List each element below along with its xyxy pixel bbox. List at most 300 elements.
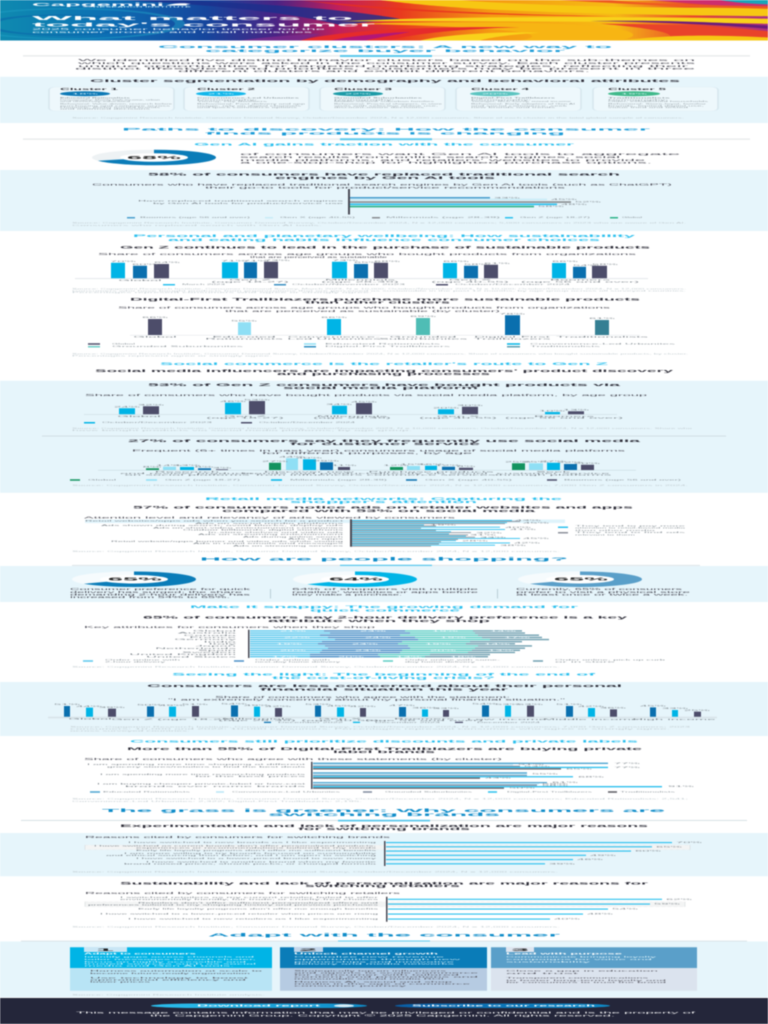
legend: Order online with same- <box>405 659 500 661</box>
legend <box>163 284 570 286</box>
bar chart: financial concern: 54% <box>221 703 247 705</box>
column 3: lead with purpose <box>491 947 697 991</box>
subtitle: consumer product and retail industries <box>32 31 312 34</box>
bar chart: social media usage: 11% <box>331 465 357 466</box>
legend: October/December 2024 <box>455 284 570 286</box>
column 2: unlock channel growth: Harness AI, social and shop <box>294 981 452 983</box>
bar chart: financial concern: Middle income <box>543 718 639 720</box>
heading: switching brands: for switching brands <box>298 827 470 831</box>
bar chart: brand switching reasons: experiences or recommendations tailored to my needs <box>136 847 376 849</box>
stat: 65% grocery delivery <box>70 573 250 599</box>
bar chart: social purchases: Global <box>117 415 161 418</box>
legend: Convenience-Led Urbanites <box>530 343 675 345</box>
legend: Millennials (age 28-39) <box>290 479 387 481</box>
panel heading: 58% of consumers have replaced traditional search <box>148 173 620 176</box>
panel heading: engines by Gen AI tools <box>275 176 495 180</box>
bar chart: financial concern: 50% <box>137 704 163 706</box>
bar chart: sustainability by age: 66% <box>443 261 469 262</box>
title: today's consumer <box>32 21 375 28</box>
bar chart: social purchases: Millennials <box>317 415 387 417</box>
bar chart: social purchases: (age 18-27) <box>206 417 284 419</box>
bar chart: sustainability by cluster: 61% <box>589 318 615 319</box>
heading: ads: compared with 53% on social media <box>222 509 536 513</box>
bar chart: private label agreement: grocery stores/retailers to find the best deals <box>107 766 305 768</box>
card: cluster 4: Digital-First Trailblazers <box>471 97 555 99</box>
heading: private labels <box>127 747 642 754</box>
source note <box>72 353 688 357</box>
stacked bar chart: delivery attributes: 19% <box>432 630 458 632</box>
bar chart: retailer switching reasons: preferences tailored to my shopping history and previous purchases <box>88 904 378 906</box>
bar chart: financial concern: 51% <box>182 704 208 705</box>
column 2: unlock channel growth: and agents to scale commerce <box>294 972 478 974</box>
bar chart: financial concern: Global <box>68 718 112 720</box>
bar chart: financial concern: Low income <box>467 718 547 720</box>
bar chart: sustainability by age: 61% <box>484 262 510 264</box>
card: cluster 3: Middle-income suburban families <box>334 100 434 102</box>
title <box>32 15 375 28</box>
legend: Grounded Suburbanites <box>385 791 472 793</box>
legend: March 2023 <box>182 284 225 286</box>
bar chart: brand switching reasons: and ethical sourcing than before, and I am open to switching <box>106 854 376 856</box>
stacked bar chart: delivery attributes: Global <box>193 630 236 632</box>
card: cluster 3: discount-aware decisions <box>334 106 424 108</box>
bar chart: social media usage: 8% <box>195 466 213 468</box>
legend: Boomers (age 56 and over) <box>564 479 681 481</box>
gen AI description: media platforms, and retailers' websites to provide <box>240 158 645 162</box>
column 1: adapt to consumers: operational efficiency and <box>90 979 246 981</box>
bar chart: private label agreement: 51% <box>518 764 544 765</box>
bar chart: financial concern: 51% <box>556 704 582 705</box>
bar chart: private label agreement: 55% <box>532 773 558 775</box>
bar chart: financial concern: Gen X <box>319 718 361 720</box>
bar chart: social purchases: 46% <box>220 401 246 402</box>
legend <box>90 791 675 793</box>
section heading: quick commerce <box>190 605 579 612</box>
legend: relevant to them <box>575 534 635 536</box>
logo: RESEARCH INSTITUTE <box>93 6 191 8</box>
stacked bar chart: delivery attributes: 13% <box>396 656 422 658</box>
bar chart: retailer switching reasons: 59% <box>654 903 680 905</box>
bar chart: private label agreement: brands over name brands <box>125 785 305 787</box>
gen AI description <box>240 152 680 164</box>
bar chart: sustainability by age: Gen X <box>449 279 491 281</box>
bar chart: social purchases: 53% <box>244 399 270 401</box>
legend: October/December 2023 <box>102 422 212 424</box>
column 3: lead with purpose: sustainability <box>506 961 591 963</box>
bar chart: social media usage: 20% <box>574 462 600 464</box>
column 2: unlock channel growth: for consumer with tailored <box>294 974 459 976</box>
source note <box>72 428 692 431</box>
bar chart: private label agreement: I am spending more time researching products <box>100 773 305 776</box>
bar chart: ads attention: 41% <box>510 529 536 530</box>
source note: Source: Capgemini Research Institute analysis. <box>72 994 265 996</box>
column 2: unlock channel growth: measurable social media ROI <box>294 978 444 980</box>
legend <box>70 479 681 481</box>
source note: Consumers who replaced search with Gen AI tools. <box>72 225 322 226</box>
bar chart: sustainability by cluster: 66% <box>321 317 347 318</box>
bar chart: social media usage: 25% <box>505 461 531 463</box>
stacked bar chart: delivery attributes: 14% <box>484 643 510 645</box>
column 3: lead with purpose: to foster long-term loyalty and <box>506 979 666 981</box>
bar chart: ads attention: Ads on streaming entertainment <box>198 533 343 536</box>
section heading: grass is greener: The grass is greener: Why consumers are <box>102 808 665 813</box>
bar chart: social media usage: Purchase products <box>369 471 493 473</box>
bar chart: financial concern: 45% <box>327 705 353 707</box>
stat: 65% in-store <box>516 573 690 596</box>
card: cluster 2 <box>184 87 309 111</box>
source note: have bought products via social media platforms, by age group. <box>72 430 412 431</box>
panel heading: social media platform <box>283 386 478 390</box>
bar chart: sustainability by age: 71% <box>243 260 269 262</box>
chart subtitle <box>132 449 625 455</box>
column 2: unlock channel growth: Capitalize new revenue <box>294 956 444 958</box>
bar chart: social media usage: Research <box>155 471 219 473</box>
bar chart: social purchases: Boomers <box>534 415 594 417</box>
bar chart: financial concern: 44% <box>76 705 102 707</box>
bar chart: financial concern: 51% <box>54 704 80 705</box>
legend: Convenience-Led Urbanites <box>232 791 340 793</box>
chart title: Share of consumers who agree with these statements (by cluster) <box>84 758 502 760</box>
bar chart: financial concern: 36% <box>412 707 438 709</box>
bar chart: social media usage: 25% <box>523 461 549 463</box>
heading: customer service <box>128 439 641 446</box>
panel: cluster segmentation <box>0 77 768 123</box>
chart subtitle: their go-to tools for product/service recommendations <box>205 186 565 189</box>
card: cluster 1 <box>49 87 174 111</box>
bar chart: sustainability by age: Global <box>118 279 162 281</box>
bar chart: sustainability by cluster: 78% <box>499 313 525 315</box>
donut: 68%: 68% <box>127 155 181 160</box>
bar chart: financial concern: 36% <box>600 707 626 709</box>
bar chart: replaced search <box>138 189 601 214</box>
source note: Percentages represent agree or strongly agree. <box>72 355 272 357</box>
bar chart: financial concern: 33% <box>662 708 688 709</box>
bar chart: private label agreement: 50% <box>509 787 535 789</box>
section heading: paths to discovery <box>23 127 750 140</box>
section heading: grass is greener: switching brands <box>268 812 500 817</box>
card: cluster 1: Educated Rationalists <box>60 97 130 99</box>
section heading: retail media: shopper's attention <box>290 500 477 504</box>
bar chart: social media usage: from influencers <box>256 474 362 476</box>
panel: search replaced by Gen AI: Global <box>622 217 642 219</box>
column 3: lead with purpose: Close a gap in education <box>506 970 658 972</box>
bar chart: financial concern: Millennials <box>222 718 292 720</box>
heading: 2-hour delivery <box>143 615 628 623</box>
legend: attention to retail-based media <box>575 527 685 529</box>
section heading: how are people shopping: How are people shopping? <box>200 557 568 561</box>
heading: influencers <box>95 369 674 376</box>
stat: 65% grocery delivery: delivery has surged; the share <box>70 590 242 594</box>
section heading: cost of living: Seeing the light: The beginning of the end of <box>172 673 596 677</box>
bar chart: ads attention: Retail website/apps banner and video ads while visiting <box>111 540 343 542</box>
bar chart: financial concern: 42% <box>265 706 291 707</box>
legend: Boomers (age 56 and over) <box>140 217 250 219</box>
bar chart: sustainability by age: 71% <box>221 260 247 262</box>
stacked bar chart: delivery attributes: 22% <box>284 637 310 638</box>
bar chart: financial concern: (age 56 and over) <box>365 719 483 722</box>
column 2: unlock channel growth: Strategically tap on influencers <box>294 970 446 972</box>
bar chart: ads attention: Ads in retail emails and messages <box>193 542 343 545</box>
card: cluster 4: Cluster 4 <box>471 88 529 90</box>
bar chart: private label agreement: for the best prices <box>195 775 305 777</box>
stat: 64% multiple sites <box>292 573 478 596</box>
section heading: quick commerce: quick commerce <box>310 609 460 612</box>
bar chart: sustainability by age: (age 40-55) <box>431 281 509 283</box>
bar chart: social media usage: 13% <box>174 465 200 466</box>
stacked bar chart: delivery attributes: France <box>189 636 236 639</box>
chart subtitle <box>168 696 565 701</box>
stat: 65% in-store: 65% <box>554 577 608 582</box>
bar chart: financial concern: (age 40-55) <box>301 719 379 722</box>
bar chart: sustainability by age: 60% <box>132 263 158 265</box>
bar chart: sustainability by age: (age 18-27) <box>211 281 289 283</box>
stacked bar chart: delivery attributes: 23% <box>352 643 378 645</box>
bar chart: social media usage <box>98 456 636 476</box>
button: subscribe <box>395 1004 610 1008</box>
subtitle <box>32 27 325 34</box>
bar chart: replaced search: 58% <box>538 206 564 207</box>
bar chart: ads attention: 28% <box>462 540 488 542</box>
bar chart: social media usage: 27% <box>540 460 566 462</box>
bar chart: financial concern: Boomers <box>394 718 454 720</box>
bar chart: retailer switching reasons: Retailers don't offer sufficient personalized offers and <box>138 902 378 904</box>
panel: social commerce <box>0 381 768 493</box>
bar chart: ads attention: 45% <box>523 522 549 524</box>
bar chart: retailer switching reasons <box>85 896 692 922</box>
bar chart: sustainability by cluster: 66% <box>142 317 168 318</box>
card: cluster 5: brands, limited digital use, <box>608 105 704 107</box>
bar chart: private label agreement: 68% <box>578 776 604 778</box>
bar chart: financial concern: 47% <box>389 705 415 706</box>
heading: ads <box>133 505 633 513</box>
bar chart: private label agreement: I am spending more time shopping at different <box>87 763 305 766</box>
card: cluster 4: Behavioral: Early adopters of Gen AI <box>471 103 575 105</box>
stacked bar chart: delivery attributes: Japan <box>195 645 236 647</box>
bar chart: social media usage: 16% <box>418 463 444 465</box>
bar chart: brand switching reasons: 65% <box>656 846 682 848</box>
bar chart: financial concern: Gen Z (age 18-27) <box>111 718 235 720</box>
card: cluster 3 <box>320 87 445 111</box>
bar chart: social purchases: (age 40-55) <box>419 417 497 419</box>
card: cluster 2: Cluster 2 <box>197 88 255 90</box>
bar chart: brand switching reasons: I have switched to another brand when my favorite <box>146 861 376 863</box>
stacked bar chart: delivery attributes: 23% <box>355 649 381 651</box>
bar chart: social purchases: (age 56 and over) <box>505 417 623 419</box>
bar chart: private label agreement: 61% <box>552 782 578 783</box>
legend: Educated Rationalists <box>103 791 190 793</box>
column 2: unlock channel growth: content and promotions and <box>294 976 478 978</box>
bar chart: private label agreement: 59% <box>542 783 568 785</box>
legend: October/December 2024 <box>259 422 355 424</box>
heading: 2-hour delivery: attribute when they shop <box>268 619 490 623</box>
source note: consumers: 10,000 and 2022: 10,000 consumers. Percentages represent consumers who agree or strongly agree. <box>70 728 670 730</box>
footer <box>0 998 768 1024</box>
bar chart: financial concern: 42% <box>350 706 376 707</box>
stat: 64% multiple sites: 64% <box>329 577 383 582</box>
legend: Traditionalists <box>620 791 675 793</box>
bar chart: ads attention: 40% <box>505 526 531 528</box>
bar chart: social purchases: (age 28-39) <box>313 417 391 419</box>
bar chart: financial concern: 45% <box>640 705 666 707</box>
bar chart: social media usage: Discover new <box>264 471 354 473</box>
column 1: adapt to consumers: become future-ready organization <box>90 972 250 974</box>
source note <box>72 798 688 802</box>
bar chart: retailer switching reasons: Early life loyalty programs don't offer me enough benefits <box>138 908 378 910</box>
bar chart: sustainability by cluster: Traditionalists <box>556 336 648 338</box>
bar chart: ads attention: 32% <box>476 532 502 534</box>
stacked bar chart: delivery attributes: 21% <box>280 630 306 632</box>
bar chart: social media usage: through platforms <box>495 474 611 476</box>
legend <box>264 721 540 723</box>
column 2: unlock channel growth: Unlock channel growth <box>294 953 438 955</box>
bar chart: private label agreement: 53% <box>524 765 550 767</box>
column 1: adapt to consumers: Harness automation at scale to <box>90 970 262 972</box>
bar chart: retailer switching reasons: 40% <box>554 918 580 920</box>
bar chart: financial concern: 53% <box>495 703 521 705</box>
intro paragraph: distinct lifestyles and priorities. Customers may be present in three <box>75 67 695 70</box>
bar chart: brand switching reasons: 60% <box>635 850 661 852</box>
column 1: adapt to consumers: tailor messages to each cluster, <box>84 958 256 961</box>
bar chart: sustainability by age: 70% <box>110 260 136 262</box>
source note <box>72 288 686 294</box>
bar chart: retailer switching reasons: I have switched to new retailers as I like experimenting <box>128 918 378 920</box>
bar chart: ads attention: Ads on streaming services <box>233 545 343 547</box>
stat: 65% grocery delivery: Consumer preference for quick <box>70 588 250 591</box>
legend: December 2023 <box>375 721 440 723</box>
card: cluster 4: Younger, tech-savvy, mixed income <box>471 100 571 102</box>
chart title: Key attributes for consumers when they shop <box>84 626 375 629</box>
legend: day home delivery <box>405 661 475 663</box>
panel: cluster segmentation: Behavioral: Practical shoppers, in-store <box>334 103 442 105</box>
stacked bar chart: delivery attributes: Germany <box>174 639 237 641</box>
column 1: adapt to consumers: Identify gaps across channels and <box>84 956 254 958</box>
bar chart: social purchases: 24% <box>114 406 140 408</box>
bar chart: social media usage: 8% <box>143 466 161 468</box>
panel: reasons for switching brands <box>0 833 768 876</box>
bar chart: social media usage: on social platforms <box>125 474 249 476</box>
bar chart: ads attention: Outdoor billboards, digital storefronts <box>183 529 343 531</box>
legend: Gen Z (age 18-27) <box>165 479 240 481</box>
heading: influencers: and purchasing processes <box>277 372 490 376</box>
bar chart: financial concern: High income <box>632 718 716 720</box>
panel: cluster segmentation: Demography: Mainly high-income, urban <box>60 99 160 101</box>
bar chart: social purchases: 10% <box>539 410 565 412</box>
bar chart: private label agreement: 91% <box>668 786 694 787</box>
section heading: consumer clusters: Consumer clusters: A new way to <box>158 45 612 49</box>
stacked bar chart: delivery attributes: 14% <box>490 630 516 632</box>
stacked bar chart: delivery attributes: 20% <box>338 656 364 658</box>
section heading: wellbeing <box>133 234 635 242</box>
section heading: consumer clusters: categorize buyer behavior <box>205 49 565 53</box>
heading: customer service: for customer service <box>290 442 480 446</box>
section heading: social commerce: Social commerce is the retailer's route to Gen Z <box>160 362 608 366</box>
bar chart: sustainability by age: Gen Z <box>229 279 271 281</box>
bar chart: sustainability by age: 58% <box>464 263 490 265</box>
column 1: adapt to consumers: focus on highly accessible and <box>84 961 246 963</box>
bar chart: brand switching reasons: 39% <box>549 863 575 865</box>
stacked bar chart: delivery attributes: 19% <box>425 643 451 645</box>
stacked bar chart: delivery attributes <box>129 630 549 658</box>
bar chart: ads attention: 45% <box>523 538 549 539</box>
stacked bar chart: delivery attributes: 23% <box>360 630 386 632</box>
column 2: unlock channel growth: opportunities through new <box>294 958 460 961</box>
bar chart: sustainability by age: 73% <box>332 259 358 261</box>
bar chart: social purchases: 30% <box>457 405 483 406</box>
column 3: lead with purpose: Communicate bringing loyalty <box>506 956 657 958</box>
bar chart: social media usage: 14% <box>156 464 182 466</box>
stacked bar chart: delivery attributes: Italy <box>209 643 237 645</box>
heading: private labels: label brands <box>333 750 435 754</box>
panel heading <box>148 173 620 180</box>
bar chart: sustainability by cluster: Digital-First <box>474 336 550 338</box>
bar chart: ads attention: 19% <box>430 524 456 526</box>
button: download report: Download report <box>197 1004 321 1007</box>
bar chart: replaced search: 45% <box>551 199 577 200</box>
heading: switching retailers: switching retailers <box>305 884 460 888</box>
button: download report <box>151 1004 367 1008</box>
bar chart: sustainability by age: 68% <box>374 260 400 262</box>
donut: 68% <box>106 152 202 164</box>
bar chart: social purchases: Gen Z <box>224 415 266 417</box>
card: cluster 1: 18% <box>72 93 98 95</box>
chart subtitle: that are perceived as sustainable <box>250 256 387 258</box>
bar chart: brand switching reasons: brand raised prices, shrank packs, or changed formula <box>124 863 376 865</box>
column 3: lead with purpose: Transparent communications <box>506 977 648 979</box>
section heading: cost of living <box>172 673 596 680</box>
panel: shopping stats <box>0 566 768 602</box>
bar chart: sustainability by age: (age 56 and over) <box>521 281 639 283</box>
bar chart: private label agreement: 77% <box>614 767 640 768</box>
bar chart: ads attention: Retail websites/apps ads when you search for a product <box>85 520 343 522</box>
legend <box>558 525 685 536</box>
column 1: adapt to consumers: trusted sources such as social <box>84 963 256 965</box>
disclaimer <box>76 1011 695 1017</box>
bar chart: financial concern: 33% <box>433 708 459 709</box>
bar chart: sustainability by cluster: Convenience- <box>288 336 381 338</box>
bar chart: brand switching reasons: I am more willing to try brands focused on sustainability <box>124 852 377 854</box>
card: cluster 4: 20% <box>482 93 508 95</box>
bar chart: brand switching reasons: I have switched to new brands as I like experimenting <box>128 841 376 844</box>
legend: They tend to pay more <box>575 525 685 527</box>
panel heading <box>147 684 622 691</box>
gen AI description: search results from online search engines, social <box>240 155 620 159</box>
bar chart: financial concern: 39% <box>99 706 125 708</box>
subheading: gen AI: Gen AI gains traction with the consumer <box>194 143 575 146</box>
source note: Convenience-Led Urbanites: 2,322; Digital-First Trailblazers: 2,195. <box>72 801 362 802</box>
source note <box>70 726 690 732</box>
column 2: unlock channel growth: media in the age of commerce <box>294 983 470 985</box>
panel heading: 53% of Gen Z consumers have bought products via <box>148 383 621 387</box>
stacked bar chart: delivery attributes: 13% <box>488 649 514 651</box>
bar chart: sustainability by cluster <box>130 313 648 340</box>
card: cluster 3: Cluster 3 <box>334 88 392 90</box>
bar chart: sustainability by age: Boomers <box>550 279 610 281</box>
bar chart: social purchases: 34% <box>326 404 352 405</box>
card: cluster 3: Demography: <box>334 99 394 101</box>
card: cluster 2: usage, rely on digital channels <box>197 105 301 107</box>
section heading: cost of living: the cost-of-living crisis? <box>272 676 495 680</box>
stacked bar chart: delivery attributes: Spain <box>198 649 236 651</box>
stacked bar chart: delivery attributes: Canada <box>184 634 236 636</box>
stacked bar chart: delivery attributes: United Kingdom <box>129 654 236 656</box>
legend: December 2022 <box>278 721 343 723</box>
bar chart: sustainability by age <box>75 259 648 283</box>
card: cluster 1: channels, prefer trusted brands <box>60 106 160 108</box>
heading: digital-first trailblazers: than other clusters <box>305 300 450 304</box>
bar chart: social purchases: 13% <box>563 409 589 411</box>
gen AI description: of consumers want Gen AI tools to aggregate <box>240 152 680 156</box>
column 2: unlock channel growth: delivery and media networks <box>294 963 454 965</box>
